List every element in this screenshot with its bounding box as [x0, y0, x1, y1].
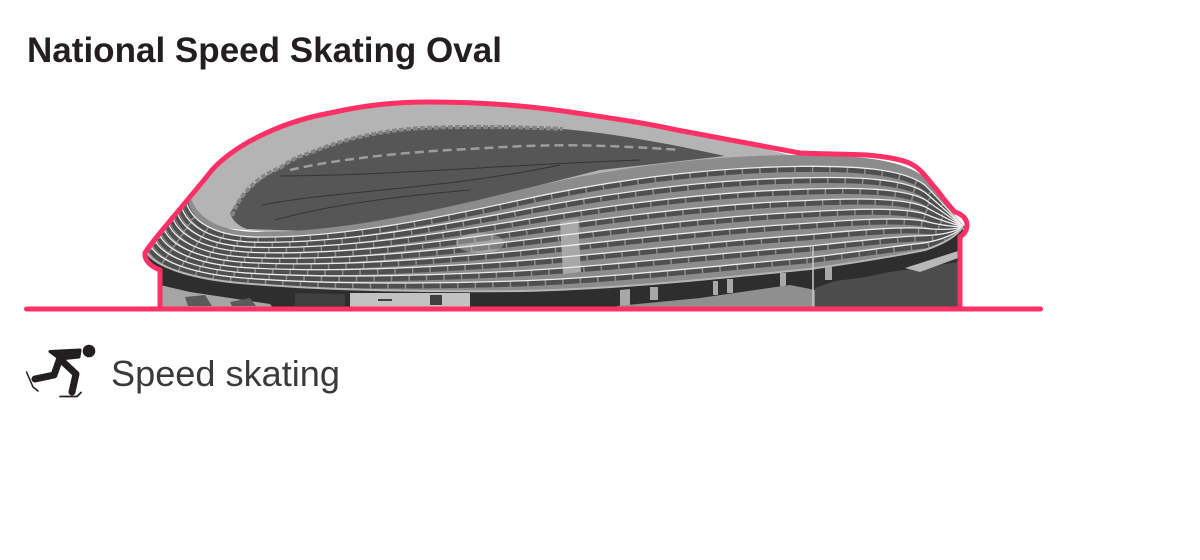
venue outline: [145, 102, 967, 308]
facade glare: [456, 233, 504, 253]
icon: speed skater: [26, 345, 95, 396]
facade window bands: [151, 169, 963, 286]
facade white rails: [151, 166, 963, 283]
activity label: Speed skating: [111, 353, 340, 394]
infographic canvas: [24, 36, 1043, 398]
roof field rim seats: [232, 127, 563, 216]
far road: [905, 251, 958, 272]
facade lower edge: [147, 227, 963, 291]
ground and debris: [162, 286, 272, 306]
title: National Speed Skating Oval: [27, 31, 502, 70]
ground floor strip: [147, 227, 965, 310]
stadium illustration: [140, 98, 967, 310]
facade base: [147, 155, 963, 291]
dark ice-hall roof field: [230, 127, 725, 232]
light facade patch: [560, 219, 581, 274]
ground line: [26, 306, 1040, 312]
trees and far ground: [815, 262, 958, 306]
lamp post: [812, 245, 814, 306]
roof surface: [191, 104, 790, 232]
